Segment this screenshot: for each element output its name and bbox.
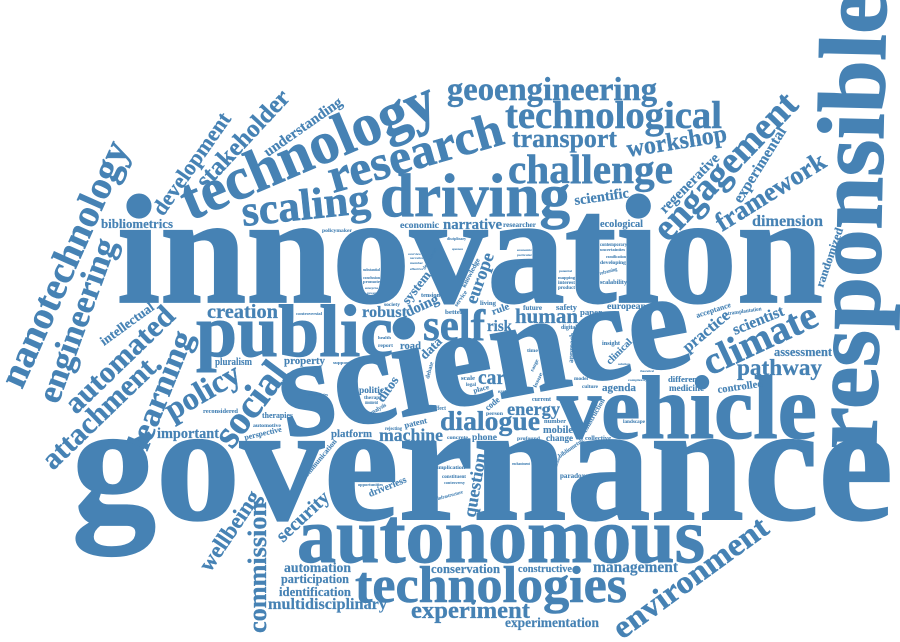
medium words: narrative: [443, 217, 502, 233]
small words: service: [454, 290, 469, 308]
word: human: human: [515, 304, 578, 328]
word: self: self: [423, 301, 486, 350]
small words: pluralism: [215, 357, 253, 368]
tiny words: concern: [513, 261, 533, 267]
tiny words: overview: [408, 252, 421, 256]
small words: controlled: [717, 379, 764, 396]
tiny words: opportunities: [358, 482, 383, 487]
tiny words: landscape: [623, 420, 646, 425]
medium words: agenda: [602, 382, 636, 394]
small words: safety: [556, 303, 578, 312]
tiny words: tension: [421, 292, 440, 299]
tiny words: constituent: [442, 475, 466, 480]
tiny words: discussion: [553, 455, 562, 467]
word: technologies: technologies: [355, 557, 627, 614]
word: machine: machine: [379, 425, 443, 445]
tiny words: complexity: [628, 378, 647, 382]
medium words: platform: [331, 428, 372, 440]
word: autonomous: autonomous: [297, 492, 705, 579]
word: dialogue: dialogue: [440, 405, 540, 436]
small words: paper: [580, 307, 602, 317]
tiny words: promote: [363, 279, 380, 284]
word: public: public: [196, 291, 393, 373]
tiny words: model: [574, 376, 588, 382]
tiny words: implication: [437, 465, 466, 471]
tiny words: earth: [498, 389, 509, 395]
small words: code: [483, 395, 502, 413]
small words: therapies: [262, 410, 294, 420]
word: car: car: [478, 368, 505, 389]
tiny words: enchantment: [512, 461, 530, 466]
medium words: experimentation: [505, 615, 600, 630]
medium words: ecological: [600, 219, 643, 230]
medium words: understanding: [261, 94, 346, 160]
tiny words: legal: [466, 383, 477, 388]
word: attachment: attachment: [35, 352, 162, 476]
small words: patent: [403, 416, 428, 430]
tiny words: developing: [600, 260, 626, 266]
medium words: randomized: [813, 225, 846, 289]
medium words: conservation: [431, 562, 500, 576]
small words: [97, 220, 764, 575]
word: challenge: challenge: [508, 146, 673, 192]
word: social: social: [203, 352, 297, 455]
tiny words: automotive: [253, 423, 281, 429]
tiny words: member: [410, 261, 423, 265]
tiny words: time: [527, 348, 539, 354]
tiny words: person: [486, 411, 504, 417]
word: transport: transport: [512, 124, 617, 153]
tiny words: narrative: [410, 256, 423, 260]
small words: european: [607, 301, 647, 312]
small words: knowledge: [460, 257, 482, 289]
small words: approach: [566, 333, 577, 363]
word: pathway: pathway: [737, 355, 822, 380]
small words: road: [400, 340, 421, 352]
tiny words: current: [532, 397, 551, 403]
medium words: question: [459, 451, 490, 519]
small words: economic: [400, 220, 440, 231]
small words: rule: [490, 301, 511, 318]
word: automated: automated: [58, 299, 182, 420]
tiny words: profound: [517, 436, 540, 442]
small words: different: [668, 374, 700, 384]
word: climate: climate: [696, 294, 824, 384]
word: policy: policy: [158, 355, 247, 427]
tiny words: number: [544, 418, 566, 425]
tiny words: reframing: [599, 267, 618, 277]
medium words: experimental: [730, 124, 790, 206]
medium words: bibliometrics: [101, 217, 173, 231]
tiny words: theoretical: [640, 369, 654, 373]
medium words: regenerative: [657, 150, 723, 217]
tiny words: issue: [532, 371, 545, 389]
tiny words: conclusion: [363, 275, 381, 280]
word: experiment: experiment: [411, 597, 531, 624]
small words: driverless: [367, 475, 408, 500]
tiny words: society: [384, 302, 400, 308]
tiny words: product: [558, 286, 575, 291]
tiny words: report: [378, 343, 393, 349]
medium words: management: [593, 559, 679, 576]
small words: researcher: [503, 220, 537, 229]
tiny words: transplantation: [727, 306, 762, 317]
small words: analysis: [369, 402, 388, 417]
tiny words: particular: [517, 253, 532, 257]
word: science: science: [264, 240, 701, 468]
medium words: important: [157, 426, 219, 442]
tiny words: effective: [410, 267, 423, 271]
small words: communication: [300, 437, 339, 481]
medium words: doing: [403, 291, 442, 321]
tiny words: living: [480, 300, 497, 307]
word: technology: technology: [169, 66, 445, 233]
tiny words: trajectories: [308, 392, 328, 397]
tiny words: policymaker: [322, 228, 352, 234]
tiny words: infrastructure: [437, 490, 464, 502]
medium words: scientist: [730, 302, 787, 339]
word: learning: learning: [121, 325, 201, 455]
word: commission: commission: [243, 501, 272, 633]
medium words: scientific: [573, 185, 631, 209]
medium words: participation: [281, 572, 349, 586]
word: engineering: engineering: [31, 233, 124, 408]
small words: medicine: [669, 383, 704, 393]
small words: construction: [580, 397, 607, 434]
word: engagement: engagement: [644, 83, 807, 249]
medium words: property: [284, 355, 325, 367]
tiny words: effect: [433, 406, 446, 412]
tiny words: future: [523, 303, 543, 312]
tiny words: uncertainties: [600, 247, 625, 252]
medium words: dimension: [752, 213, 823, 230]
medium words: automation: [284, 560, 351, 575]
tiny words: controversy: [444, 480, 466, 485]
tiny words: disciplinary: [447, 236, 466, 241]
small words: intellectual: [97, 299, 157, 348]
word: creation: creation: [207, 301, 278, 323]
tiny words: health: [378, 335, 392, 340]
word: innovation: innovation: [117, 164, 823, 336]
tiny words: enterprise: [365, 286, 378, 290]
tiny words: controversial: [296, 311, 323, 316]
medium words: identification: [279, 585, 351, 599]
tiny words: therapy: [364, 395, 382, 401]
small words: politic: [359, 385, 385, 396]
tiny words: range: [530, 358, 541, 373]
medium words: practice: [678, 306, 733, 356]
tiny words: moment: [365, 401, 378, 406]
medium words: risk: [487, 318, 512, 335]
tiny words: support: [333, 360, 351, 365]
small words: ditos: [373, 373, 402, 405]
tiny words: democratic: [422, 247, 439, 271]
medium words: security: [272, 487, 334, 547]
tiny words: power: [367, 291, 376, 295]
tiny words: contemporary: [600, 243, 628, 248]
medium words: data: [417, 333, 445, 362]
word: scaling: scaling: [239, 174, 372, 236]
tiny words: interest: [558, 280, 575, 286]
word: driving: driving: [380, 163, 570, 230]
small words: paradoxes: [560, 472, 591, 480]
small words: clinical: [604, 337, 635, 367]
word: framework: framework: [709, 145, 831, 237]
word: environment: environment: [605, 508, 775, 642]
small words: reconsidered: [203, 408, 238, 415]
word: geoengineering: geoengineering: [447, 72, 657, 108]
medium words: assessment: [774, 345, 833, 359]
small words: acceptance: [695, 300, 732, 320]
word: europe: europe: [461, 250, 498, 306]
word: robust: robust: [362, 304, 408, 321]
medium words: mobile: [543, 425, 573, 436]
small words: place: [472, 383, 490, 395]
tiny words: rejecting: [385, 427, 402, 432]
word: energy: energy: [507, 399, 560, 419]
word: technological: technological: [505, 95, 722, 137]
word: workshop: workshop: [625, 120, 729, 163]
tiny words: better: [445, 309, 463, 316]
tiny words: substantial: [363, 267, 381, 272]
tiny words: economic: [517, 248, 532, 252]
tiny words: scalability: [600, 280, 627, 286]
tiny words: openness: [452, 247, 464, 251]
tiny words: potential: [559, 269, 572, 273]
tiny words: scale: [461, 375, 475, 382]
small words: change: [546, 433, 573, 443]
tiny words: solution: [618, 362, 630, 366]
word: development: development: [147, 107, 236, 220]
word: wellbeing: wellbeing: [193, 485, 266, 576]
small words: perspective: [243, 425, 283, 442]
word: vehicle: vehicle: [557, 359, 817, 458]
tiny words: culture: [582, 384, 599, 390]
tiny words: bibliometric: [558, 437, 586, 460]
medium words: system: [399, 268, 434, 307]
small words: phone: [472, 432, 498, 443]
tiny words: concrete: [447, 435, 468, 441]
tiny words: debate: [425, 361, 435, 380]
tiny words: mapping: [558, 275, 576, 280]
medium words: [101, 94, 846, 630]
tiny words: [253, 228, 762, 502]
small words: constructive: [518, 563, 572, 575]
tiny words: digital: [561, 324, 577, 331]
word: governance: governance: [72, 370, 893, 556]
tiny words: ramification: [606, 254, 627, 259]
word: research: research: [321, 101, 509, 204]
medium words: multidisciplinary: [268, 596, 387, 613]
tiny words: insight: [602, 340, 621, 347]
word: stakeholder: stakeholder: [191, 84, 296, 194]
small words: collective: [585, 436, 611, 442]
